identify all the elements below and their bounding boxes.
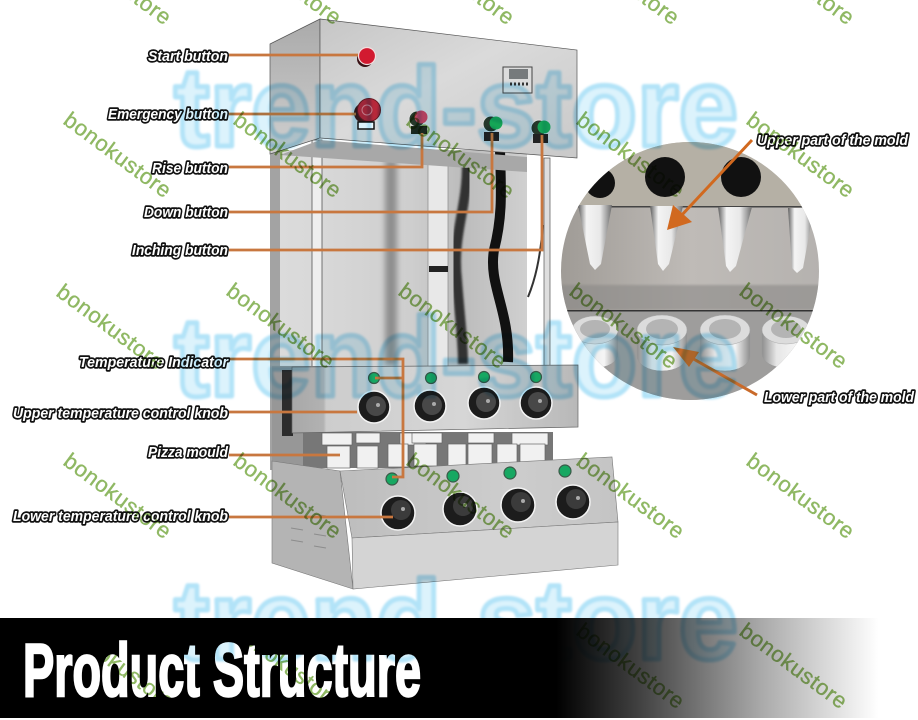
line: start button — [229, 54, 358, 56]
watermark: large trend-store text: trend-store — [174, 558, 738, 683]
cabinet front panel — [320, 19, 577, 158]
label: upper part of the mold: Upper part of the mold — [757, 132, 909, 149]
machine lower rear — [272, 366, 332, 466]
back panel — [270, 150, 527, 368]
watermark: bonokustore repeated: bonokustore — [402, 448, 520, 544]
line: temperature indicator — [229, 359, 403, 477]
indicators: lower lights — [386, 465, 571, 485]
watermark: large trend-store text: trend-store — [174, 295, 738, 420]
label: rise button: Rise button — [152, 160, 228, 177]
banner title: Product Structure — [23, 628, 421, 712]
control: emergency button — [354, 98, 380, 129]
arrow: lower part of the mold — [673, 347, 757, 395]
watermark: bonokustore repeated: bonokustore — [59, 448, 177, 544]
control: down button — [483, 116, 502, 141]
watermark: large trend-store text: trend-store — [174, 45, 738, 170]
banner — [0, 618, 918, 718]
watermark: bonokustore repeated: bonokustore — [394, 278, 512, 374]
line: emergency button — [229, 113, 356, 115]
watermark: bonokustore repeated: bonokustore — [742, 448, 860, 544]
line: upper knob — [229, 411, 357, 413]
label: upper temperature control knob: Upper temperature control knob — [13, 405, 228, 422]
watermark: bonokustore repeated: bonokustore — [742, 107, 860, 203]
cable hoses — [456, 165, 467, 364]
watermark: large trend-store text — [174, 45, 738, 683]
watermark: bonokustore repeated: bonokustore — [402, 108, 520, 204]
line: lower knob — [229, 516, 393, 518]
watermark: bonokustore repeated: bonokustore — [52, 279, 170, 375]
watermark: bonokustore repeated: bonokustore — [735, 278, 853, 374]
upper heating head — [292, 365, 578, 433]
watermark: bonokustore repeated: bonokustore — [229, 448, 347, 544]
label: pizza mould: Pizza mould — [148, 444, 229, 461]
knobs: upper temperature — [358, 387, 552, 423]
watermark: bonokustore repeated: bonokustore — [59, 107, 177, 203]
watermark: bonokustore repeated: bonokustore — [572, 107, 690, 203]
knobs: lower temperature — [381, 485, 590, 530]
watermark: bonokustore repeated: bonokustore — [62, 618, 180, 714]
cabinet side panel — [270, 19, 320, 154]
watermark: bonokustore repeated: bonokustore — [572, 618, 690, 714]
label: down button: Down button — [144, 204, 228, 221]
upper mold cones — [578, 205, 814, 273]
watermark: bonokustore repeated: bonokustore — [229, 618, 347, 714]
watermark: bonokustore repeated: bonokustore — [735, 618, 853, 714]
label: temperature indicator: Temperature Indicator — [79, 354, 229, 371]
indicators: upper lights — [368, 372, 542, 384]
watermark: bonokustore repeated: bonokustore — [402, 618, 520, 714]
arrow: upper part of the mold — [667, 140, 752, 230]
line: down button — [229, 133, 492, 212]
callout leader lines — [229, 55, 542, 517]
cabinet shelf — [280, 140, 527, 172]
control: digital timer — [503, 67, 532, 93]
line: rise button — [229, 133, 422, 167]
label: lower temperature control knob: Lower temperature control knob — [13, 508, 228, 525]
label: inching button: Inching button — [132, 242, 228, 259]
line: pizza mould — [229, 454, 340, 456]
machine base — [272, 461, 353, 589]
label: start button: Start button — [148, 48, 228, 65]
labels — [13, 48, 915, 525]
lower mold rings — [572, 315, 810, 371]
mould row — [303, 432, 553, 468]
label: emergency button: Emergency button — [108, 106, 228, 123]
mold close-up circle — [560, 142, 822, 401]
control: inching button — [531, 120, 550, 143]
watermark: bonokustore repeated: bonokustore — [229, 107, 347, 203]
watermark: bonokustore repeated: bonokustore — [565, 278, 683, 374]
knobs in close-up — [585, 157, 761, 198]
control: rise button — [409, 110, 428, 134]
control: start button — [357, 48, 376, 67]
base vent slots — [291, 514, 326, 548]
watermark: bonokustore repeated: bonokustore — [572, 448, 690, 544]
watermark: bonokustore repeated: bonokustore — [222, 278, 340, 374]
line: inching button — [229, 135, 542, 250]
pizza cone machine — [270, 19, 618, 589]
